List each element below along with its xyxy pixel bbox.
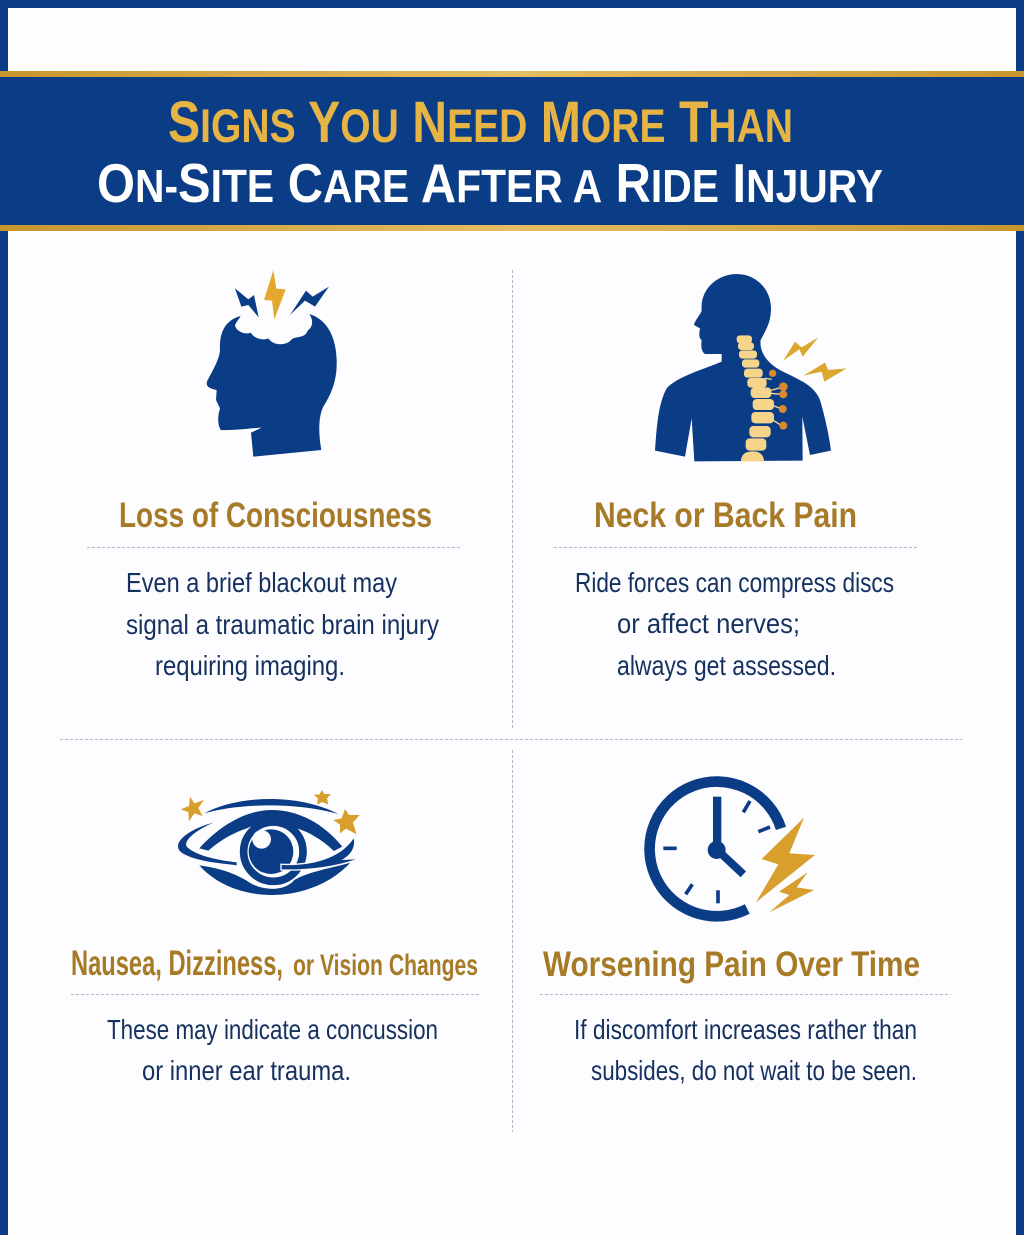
- heading continuation: or Vision Changes: [293, 949, 478, 982]
- panel: worsening pain over time: [543, 782, 920, 1086]
- title banner: [0, 71, 1024, 231]
- description: [574, 1014, 917, 1086]
- description: or inner ear trauma.: [142, 1055, 351, 1086]
- heading: Worsening Pain Over Time: [543, 945, 920, 984]
- description: These may indicate a concussion: [107, 1014, 438, 1045]
- title line 1: SIGNS YOU NEED MORE THAN: [168, 90, 793, 155]
- description: [126, 567, 439, 681]
- panel: loss of consciousness: [119, 270, 439, 681]
- icon: dizzy eye with stars: [178, 790, 360, 895]
- description: [107, 1014, 438, 1086]
- title line 2: ON-SITE CARE AFTER A RIDE INJURY: [97, 152, 883, 214]
- grid dividers: [60, 270, 962, 1132]
- heading: Loss of Consciousness: [119, 496, 432, 535]
- description: [575, 567, 894, 681]
- description: requiring imaging.: [155, 650, 345, 681]
- description: signal a traumatic brain injury: [126, 609, 439, 640]
- description: Even a brief blackout may: [126, 567, 397, 598]
- description: subsides, do not wait to be seen.: [591, 1055, 917, 1086]
- panel: neck or back pain: [575, 274, 894, 681]
- description: If discomfort increases rather than: [574, 1014, 917, 1045]
- icon: clock with lightning: [650, 782, 815, 916]
- description: or affect nerves;: [617, 608, 800, 639]
- icon: torso with spine: [655, 274, 847, 461]
- description: Ride forces can compress discs: [575, 567, 894, 598]
- heading: Nausea, Dizziness,: [71, 944, 283, 983]
- panel: nausea, dizziness, vision changes: [71, 790, 478, 1086]
- heading: Neck or Back Pain: [594, 496, 857, 535]
- icon: head with lightning: [207, 270, 337, 457]
- description: always get assessed.: [617, 650, 836, 681]
